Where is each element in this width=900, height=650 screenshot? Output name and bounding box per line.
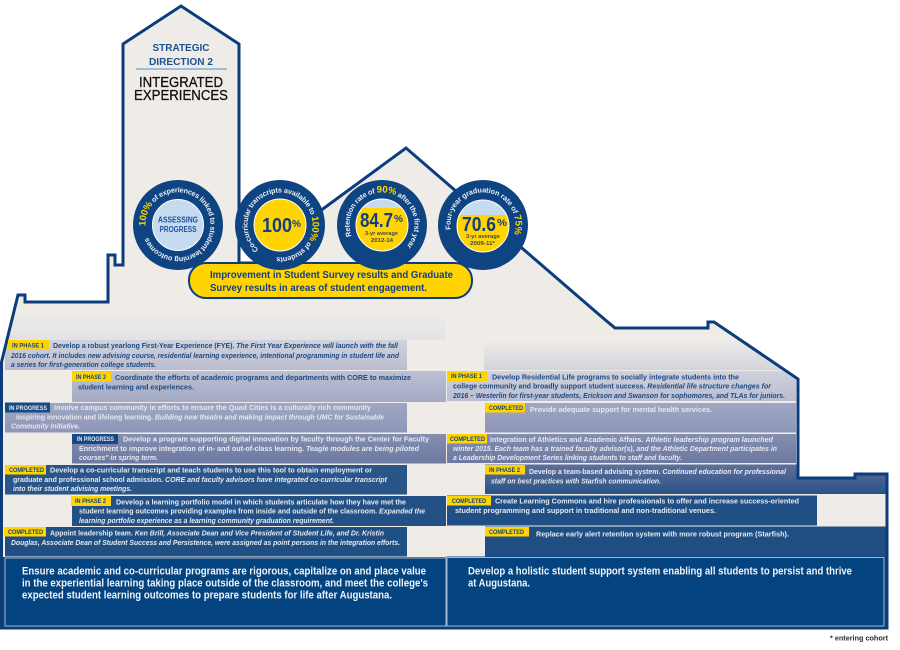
item: residential life: college community and broadly support student success. Residential life structure changes for [453, 384, 771, 390]
title block: INTEGRATED [139, 75, 223, 91]
item: athletics integration: COMPLETED [450, 437, 486, 443]
student support outcome statement [468, 566, 852, 590]
item: learning portfolio [71, 496, 425, 525]
item: leadership team: Douglas, Associate Dean of Student Success and Persistence, were assigned as point persons in the integration efforts. [11, 540, 400, 547]
item: learning portfolio: student learning outcomes providing examples from inside and outside of the classroom. Expanded the [79, 508, 425, 516]
item: learning portfolio: Develop a learning portfolio model in which students articulate how they have met the [116, 500, 406, 506]
circle: assessing progress: ASSESSING [158, 216, 198, 224]
item: residential life: 2016 – Westerlin for first-year students, Erickson and Swanson for sophomores, and TLAs for juniors. [452, 393, 785, 400]
student support outcome statement: Develop a holistic student support system enabling all students to persist and thrive [468, 566, 852, 578]
item: learning commons: student programming and support in traditional and non-traditional venues. [455, 508, 716, 515]
title block: EXPERIENCES [134, 88, 228, 104]
item: campus community: Involve campus community in efforts to ensure the Quad Cities is a culturally rich community [54, 405, 371, 412]
item: early alert system: COMPLETED [489, 530, 525, 536]
activity bars [5, 312, 887, 556]
item: team-based advising: staff on best practices with Starfish communication. [491, 478, 661, 486]
item: learning commons: Create Learning Commons and hire professionals to offer and increase success-oriented [495, 498, 799, 506]
item: coordinate efforts: Coordinate the efforts of academic programs and departments with CORE to maximize [115, 375, 411, 382]
circle: retention rate: % [394, 214, 403, 225]
item: leadership team: COMPLETED [8, 530, 44, 536]
item: campus community: Community Initiative. [11, 424, 80, 430]
item: digital innovation: Enrichment to improve integration of in- and out-of-class learning. Teagle modules are being piloted [79, 446, 420, 453]
title block: STRATEGIC [152, 43, 210, 54]
item: campus community [5, 402, 384, 430]
item: first-year experience [8, 340, 400, 369]
callout pill: Survey results in areas of student engagement. [210, 283, 427, 294]
item: learning portfolio: learning portfolio experience as a learning community graduation requirement. [79, 518, 334, 525]
academic outcome statement [22, 566, 428, 602]
academic outcome statement: in the experiential learning taking place outside of the classroom, and meet the college's [22, 578, 428, 590]
callout pill [189, 263, 472, 298]
callout pill: Improvement in Student Survey results and Graduate [210, 270, 453, 281]
item: learning commons [447, 496, 799, 515]
item: mental health [485, 403, 712, 414]
item: mental health: Provide adequate support for mental health services. [530, 407, 712, 414]
item: athletics integration: a Leadership Development Series linking students to staff and faculty. [453, 455, 682, 462]
item: early alert system: Replace early alert retention system with more robust program (Starfish). [536, 532, 789, 538]
item: coordinate efforts: student learning and experiences. [78, 384, 194, 392]
circle: graduation rate: 2009-11* [470, 241, 496, 247]
academic outcome statement: Ensure academic and co-curricular programs are rigorous, capitalize on and place value [22, 566, 426, 578]
circle: graduation rate: 3-yr average [466, 234, 501, 240]
item: first-year experience: IN PHASE 1 [12, 344, 45, 350]
item: residential life: IN PHASE 1 [451, 374, 483, 380]
base panel outlines [5, 558, 884, 626]
base panel: student support [446, 556, 887, 629]
student support outcome statement: at Augustana. [468, 578, 530, 590]
item: first-year experience: a series for first-generation college students. [11, 362, 156, 369]
item: early alert system [485, 527, 789, 538]
item: digital innovation: Develop a program supporting digital innovation by faculty through the Center for Faculty [123, 436, 429, 444]
academic outcome statement: expected student learning outcomes to prepare students for life after Augustana. [22, 590, 392, 602]
item: co-curricular transcript: into their student advising meetings. [13, 486, 132, 493]
item: co-curricular transcript: Develop a co-curricular transcript and teach students to use this tool to obtain employment or [50, 468, 372, 474]
item: residential life: Develop Residential Life programs to socially integrate students into the [492, 374, 739, 382]
item: coordinate efforts [72, 372, 411, 392]
item: athletics integration: Integration of Athletics and Academic Affairs. Athletic leadership program launched [490, 437, 774, 444]
item: team-based advising [485, 465, 787, 486]
item: digital innovation: courses" in spring term. [79, 455, 158, 462]
item: campus community: inspiring innovation and lifelong learning. Building new theatre and making impact through UMC for Sustainable [16, 414, 384, 422]
item: athletics integration [447, 434, 777, 462]
item: co-curricular transcript: COMPLETED [9, 468, 45, 474]
title block [134, 43, 228, 104]
item: first-year experience: 2016 cohort. It includes new advising course, residential learning experience, intentional programming in student life and [10, 353, 400, 360]
item: leadership team: Appoint leadership team. Ken Brill, Associate Dean and Vice President of Student Life, and Dr. Kristin [50, 530, 384, 538]
footnote: * entering cohort [830, 634, 888, 642]
circle: retention rate: 2012-14 [371, 238, 394, 244]
circle: retention rate: 84.7 [360, 210, 393, 232]
item: learning commons: COMPLETED [452, 499, 487, 505]
circle: co-curricular transcripts: 100 [262, 215, 292, 237]
circle: retention rate: Retention rate of 90% after the first year [344, 186, 420, 249]
item: digital innovation [72, 434, 429, 462]
circle: retention rate: 3-yr average [365, 231, 399, 237]
item: first-year experience: Develop a robust yearlong First-Year Experience (FYE). The First Year Experience will launch with the fall [53, 343, 399, 350]
item: team-based advising: Develop a team-based advising system. Continued education for professional [529, 469, 787, 476]
item: learning portfolio: IN PHASE 2 [75, 499, 107, 505]
circle: graduation rate: Four-year graduation rate of 75% [445, 188, 522, 234]
item: campus community: IN PROGRESS [9, 406, 47, 412]
item: co-curricular transcript: graduate and professional school admission. CORE and faculty advisors have integrated co-curricular transcript [13, 477, 388, 484]
item: digital innovation: IN PROGRESS [77, 437, 114, 443]
item: coordinate efforts: IN PHASE 2 [76, 375, 107, 381]
base panel: academic [2, 557, 446, 629]
circle: graduation rate: 70.6 [462, 214, 496, 236]
circle: graduation rate: % [497, 218, 507, 229]
circle: assessing progress: 100% of experiences linked to student learning outcomes [138, 187, 215, 262]
circle: retention rate [337, 180, 427, 270]
circle: co-curricular transcripts: Co-curricular transcripts available to 100% of students [242, 188, 320, 262]
item: mental health: COMPLETED [489, 406, 524, 412]
circle: co-curricular transcripts: % [292, 219, 301, 230]
circle: assessing progress: PROGRESS [160, 225, 197, 234]
item: team-based advising: IN PHASE 2 [489, 468, 521, 474]
item: residential life [447, 371, 785, 400]
item: athletics integration: winter 2015. Each team has a trained faculty advisor(s), and the Athletic Department participates in [453, 446, 777, 453]
circle: graduation rate [438, 180, 528, 270]
item: leadership team [4, 527, 400, 547]
item: co-curricular transcript [5, 465, 388, 493]
title block: DIRECTION 2 [149, 57, 213, 68]
